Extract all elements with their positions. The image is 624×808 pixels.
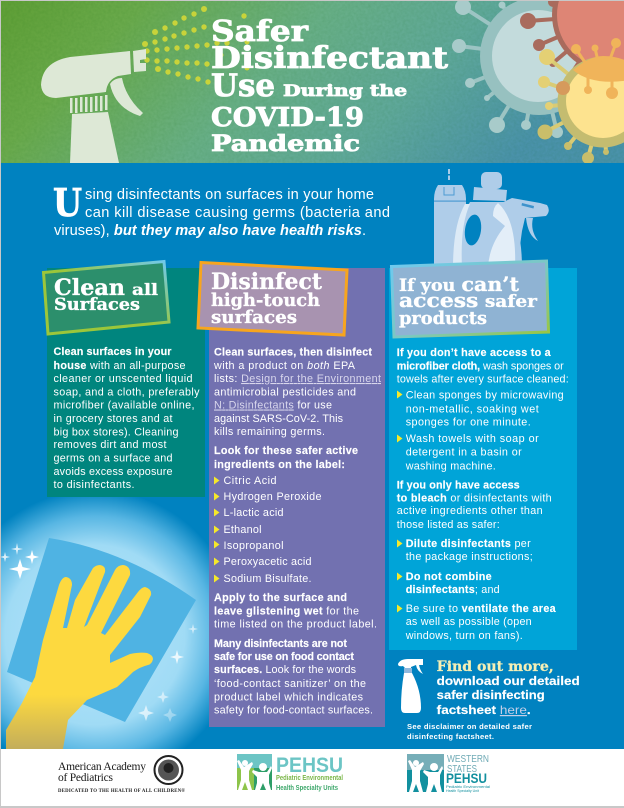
- callout: find out more: See disclaimer on detailed safer: [407, 722, 532, 731]
- logo: Western States PEHSU: Pediatric Environmental: [446, 785, 490, 789]
- logo: American Academy of Pediatrics: American Academy: [58, 761, 146, 773]
- text block: only bleach: [397, 480, 557, 642]
- text block: apply and food contact: surfaces. Look for the words: [214, 664, 357, 676]
- icon: yellow virus: [538, 38, 624, 164]
- logo: Western States PEHSU: STATES: [447, 764, 477, 775]
- text block: no microfiber cloth: Wash towels with soap or: [406, 433, 539, 445]
- callout: find out more: safer disinfecting: [437, 688, 545, 702]
- title: Safer: [211, 14, 309, 48]
- logo: Western States PEHSU: Health Specialty Unit: [446, 789, 479, 793]
- text block: apply and food contact: time listed on the product label.: [214, 618, 377, 630]
- logo: PEHSU: [237, 754, 343, 792]
- list: safer active ingredients: Citric Acid: [224, 475, 276, 487]
- icon: spray droplets: [142, 6, 250, 85]
- list: safer active ingredients: Hydrogen Peroxide: [224, 491, 322, 503]
- text block: disinfect instructions: kills remaining germs.: [214, 426, 325, 438]
- text block: disinfect instructions: [213, 346, 381, 471]
- callout: find out more: disinfecting factsheet.: [407, 732, 494, 741]
- footer band: [1, 749, 624, 806]
- text block: no microfiber cloth: sponges for one minute.: [406, 416, 531, 428]
- text block: no microfiber cloth: If you don’t have access to a: [397, 347, 552, 359]
- callout: find out more: Find out more,: [437, 659, 554, 675]
- text block: only bleach: windows, turn on fans).: [405, 630, 523, 642]
- intro text: [53, 180, 390, 239]
- heading badge: if you can't access safer products: If you can’t: [399, 272, 520, 296]
- text block: only bleach: Be sure to ventilate the area: [406, 603, 557, 615]
- logo: American Academy of Pediatrics: [58, 756, 185, 794]
- text block: apply and food contact: safety for food-contact surfaces.: [214, 704, 373, 716]
- list: safer active ingredients: [214, 475, 322, 585]
- text block: clean surfaces: big box stores). Cleaning: [54, 426, 178, 438]
- text block: apply and food contact: safe for use on food contact: [214, 651, 354, 663]
- text block: only bleach: the package instructions;: [406, 551, 533, 563]
- list: safer active ingredients: Ethanol: [224, 524, 262, 536]
- logo: Western States PEHSU: WESTERN: [447, 754, 489, 765]
- text block: clean surfaces: Clean surfaces in your: [54, 346, 172, 358]
- text block: only bleach: active ingredients other than: [397, 505, 543, 517]
- list: safer active ingredients: Peroxyacetic acid: [224, 556, 312, 568]
- logo: Western States PEHSU: PEHSU: [446, 770, 487, 786]
- icon: white spray bottle: [398, 659, 423, 713]
- heading badge: if you can't access safer products: [392, 261, 548, 337]
- text block: no microfiber cloth: Clean sponges by microwaving: [406, 390, 564, 402]
- title: COVID-19: [211, 103, 364, 133]
- blue body background: [1, 163, 624, 749]
- text block: apply and food contact: product label which indicates: [214, 692, 364, 704]
- heading badge: clean all surfaces: [44, 262, 169, 334]
- text block: disinfect instructions: ingredients on the label:: [214, 459, 345, 471]
- text block: apply and food contact: Apply to the surface and: [214, 592, 347, 604]
- heading badge: clean all surfaces: Surfaces: [54, 295, 140, 314]
- text block: disinfect instructions: with a product on both EPA: [213, 360, 356, 372]
- glow: [1, 497, 209, 749]
- list: safer active ingredients: Isopropanol: [224, 540, 284, 552]
- icon: pale virus: [452, 1, 576, 138]
- text block: clean surfaces: to disinfectants.: [54, 479, 134, 491]
- text block: disinfect instructions: lists: Design for the Environment: [214, 373, 381, 385]
- text block: no microfiber cloth: washing machine.: [405, 460, 496, 472]
- heading badge: if you can't access safer products: access safer: [399, 288, 538, 312]
- logo: PEHSU: Health Specialty Units: [276, 783, 338, 792]
- logo: PEHSU: PEHSU: [276, 754, 343, 777]
- text block: clean surfaces: germs on a surface and: [54, 452, 172, 464]
- text block: clean surfaces: cleaner or unscented liquid: [54, 373, 192, 385]
- text block: clean surfaces: [54, 346, 200, 491]
- callout: find out more: [398, 659, 580, 741]
- logo: Western States PEHSU: [407, 754, 490, 793]
- title: During the: [283, 81, 407, 100]
- text block: clean surfaces: avoids excess exposure: [54, 466, 172, 478]
- text block: no microfiber cloth: [397, 347, 569, 472]
- list: safer active ingredients: Sodium Bisulfate.: [224, 573, 312, 585]
- heading badge: disinfect high-touch surfaces: surfaces: [211, 307, 297, 328]
- panel: clean: [44, 262, 205, 497]
- panel: disinfect: [198, 262, 385, 727]
- logo: PEHSU: Pediatric Environmental: [276, 773, 343, 782]
- text block: only bleach: as well as possible (open: [406, 616, 532, 628]
- heading badge: disinfect high-touch surfaces: high-touch: [211, 290, 320, 311]
- intro text: U: [53, 180, 82, 225]
- logo: American Academy of Pediatrics: of Pediatrics: [58, 772, 114, 784]
- heading badge: clean all surfaces: all: [132, 280, 158, 299]
- text block: clean surfaces: soap, and a cloth, preferably: [54, 386, 200, 398]
- text block: only bleach: to bleach or disinfectants with: [397, 492, 552, 504]
- text block: apply and food contact: Many disinfectants are not: [214, 638, 347, 650]
- intro text: sing disinfectants on surfaces in your home: [85, 187, 374, 203]
- cloth: [7, 538, 196, 722]
- header banner: [1, 0, 624, 164]
- text block: no microfiber cloth: microfiber cloth, wash sponges or: [397, 360, 564, 372]
- heading badge: clean all surfaces: Clean: [54, 275, 125, 301]
- text block: only bleach: those listed as safer:: [397, 519, 500, 531]
- text block: apply and food contact: leave glistening wet for the: [214, 606, 359, 618]
- heading badge: disinfect high-touch surfaces: Disinfect: [211, 269, 323, 295]
- text block: no microfiber cloth: towels after every surface cleaned:: [397, 374, 569, 386]
- text block: only bleach: disinfectants; and: [406, 584, 500, 596]
- text block: no microfiber cloth: non-metallic, soaking wet: [406, 404, 539, 416]
- heading badge: if you can't access safer products: products: [399, 308, 487, 329]
- title: [211, 14, 448, 157]
- yellow glove: [6, 565, 153, 749]
- illustration: gloved hand wiping: [1, 497, 209, 749]
- intro text: can kill disease causing germs (bacteria and: [85, 205, 390, 221]
- panel: no access to safer products: [389, 261, 577, 650]
- text block: apply and food contact: [214, 592, 377, 716]
- intro text: viruses), but they may also have health risks.: [54, 223, 366, 239]
- text block: disinfect instructions: Look for these safer active: [214, 445, 358, 457]
- icon: spray bottle: [41, 49, 146, 163]
- text block: disinfect instructions: against SARS-CoV-2. This: [214, 413, 344, 425]
- text block: apply and food contact: ‘food-contact sanitizer’ on the: [214, 678, 366, 690]
- title: Disinfectant: [211, 41, 448, 76]
- icon: product bottles: [434, 169, 549, 268]
- text block: only bleach: Dilute disinfectants per: [406, 538, 531, 550]
- sparkles: [0, 543, 198, 722]
- text block: no microfiber cloth: detergent in a basin or: [406, 446, 522, 458]
- text block: disinfect instructions: Clean surfaces, then disinfect: [214, 346, 372, 358]
- heading badge: disinfect high-touch surfaces: [198, 262, 347, 335]
- title: Use: [211, 68, 275, 104]
- text block: clean surfaces: house with an all-purpose: [54, 360, 186, 372]
- text block: only bleach: If you only have access: [397, 480, 520, 492]
- title: Pandemic: [211, 131, 360, 157]
- callout: find out more: download our detailed: [437, 674, 580, 688]
- callout: find out more: factsheet here .: [437, 703, 531, 717]
- text block: clean surfaces: removes dirt and most: [54, 439, 166, 451]
- text block: clean surfaces: in grocery stores and at: [54, 413, 172, 425]
- text block: only bleach: Do not combine: [406, 571, 492, 583]
- text block: clean surfaces: microfiber (available online,: [54, 400, 194, 412]
- text block: disinfect instructions: N: Disinfectants for use: [214, 400, 332, 412]
- text block: disinfect instructions: antimicrobial pesticides and: [214, 386, 356, 398]
- logo: American Academy of Pediatrics: DEDICATED TO THE HEALTH OF ALL CHILDREN®: [58, 788, 185, 794]
- list: safer active ingredients: L-lactic acid: [224, 507, 284, 519]
- icon: red virus: [520, 0, 624, 94]
